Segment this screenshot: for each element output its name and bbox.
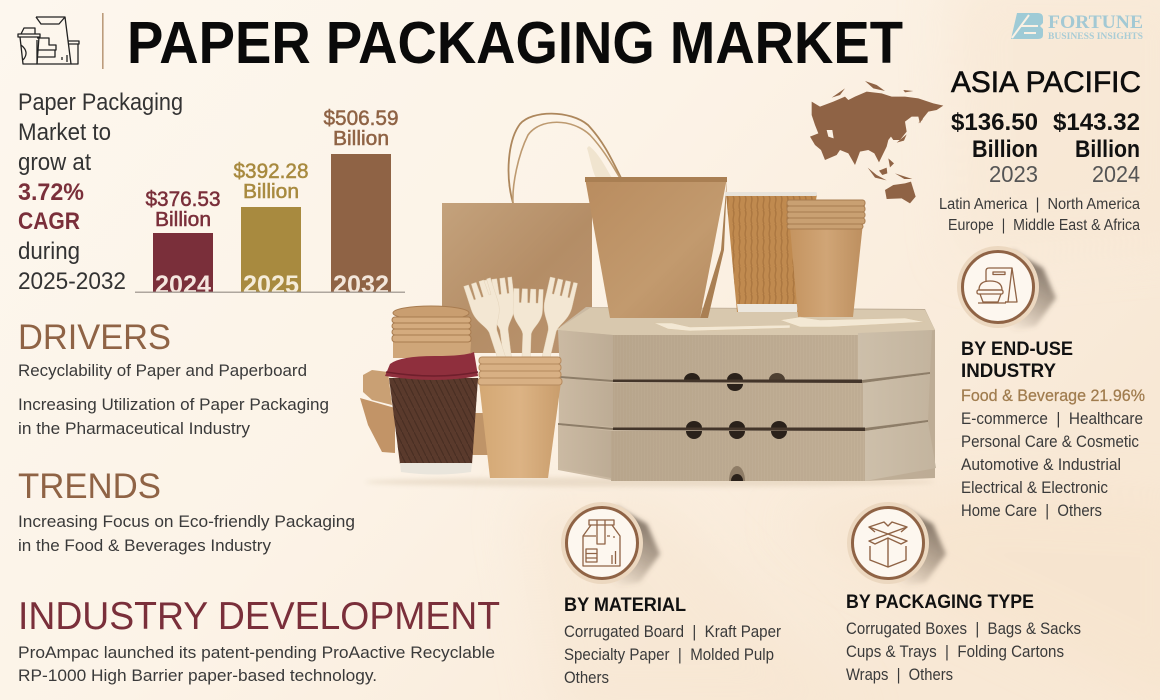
bar: 2024	[146, 188, 220, 299]
text block: CAGR summary: Paper Packaging	[18, 89, 183, 116]
bar: 2032: 2032	[333, 271, 389, 299]
text block: CAGR summary: 3.72%	[18, 179, 84, 206]
pizza box: top	[558, 330, 932, 382]
wooden forks on box	[654, 317, 925, 331]
by material	[564, 595, 781, 687]
text block: CAGR summary: 2025-2032	[18, 268, 126, 295]
bar chart: market size	[135, 107, 405, 299]
value: 2023	[951, 109, 1038, 187]
by packaging type: Corrugated Boxes | Bags & Sacks	[846, 620, 1081, 638]
pizza box: bottom	[558, 422, 936, 481]
paper bag	[442, 114, 621, 353]
paper cup stack, back	[787, 200, 865, 317]
by material: Corrugated Board | Kraft Paper	[564, 623, 781, 641]
photo: paper packaging products	[360, 114, 936, 487]
icon: by material	[561, 502, 660, 590]
kraft food pail	[585, 146, 727, 318]
bowl stack	[392, 306, 471, 358]
trends section: TRENDS	[18, 467, 161, 506]
logo: Fortune Business Insights: BUSINESS INSIGHTS	[1048, 32, 1143, 42]
left trays	[360, 370, 490, 455]
icon: by packaging type	[847, 502, 946, 590]
by material: BY MATERIAL	[564, 595, 686, 616]
value: 2023: $136.50	[951, 109, 1038, 136]
region: Asia Pacific: Latin America | North America	[939, 196, 1140, 213]
title: PAPER PACKAGING MARKET	[127, 10, 903, 76]
kraft cup with forks	[478, 357, 562, 478]
logo: Fortune Business Insights	[1011, 12, 1143, 42]
industry development section: RP-1000 High Barrier paper-based technology.	[18, 666, 377, 685]
by end-use industry: Personal Care & Cosmetic	[961, 433, 1139, 451]
by end-use industry	[961, 339, 1145, 520]
bar: 2032	[324, 107, 398, 299]
by packaging type: BY PACKAGING TYPE	[846, 592, 1034, 613]
industry development section: ProAmpac launched its patent-pending ProAactive Recyclable	[18, 643, 495, 662]
value: 2023: Billion	[972, 136, 1038, 163]
asia pacific map	[810, 81, 943, 203]
region: Asia Pacific	[939, 66, 1141, 234]
by material: Specialty Paper | Molded Pulp	[564, 646, 774, 664]
bar: 2032: Billion	[333, 128, 389, 150]
by material: Others	[564, 669, 609, 687]
drivers section	[18, 318, 329, 438]
region: Asia Pacific: ASIA PACIFIC	[951, 66, 1141, 99]
value: 2023: 2023	[989, 161, 1038, 187]
bar: 2025	[234, 160, 308, 299]
drivers section: in the Pharmaceutical Industry	[18, 419, 251, 438]
drivers section: Recyclability of Paper and Paperboard	[18, 361, 307, 380]
value: 2024: 2024	[1092, 161, 1140, 187]
bar: 2024: Billion	[155, 209, 211, 231]
bar: 2025: $392.28	[234, 160, 308, 183]
trends section	[18, 467, 355, 555]
by packaging type	[846, 592, 1081, 684]
text block: CAGR summary: Market to	[18, 119, 111, 146]
by packaging type: Wraps | Others	[846, 666, 953, 684]
text block: CAGR summary: during	[18, 238, 80, 265]
drivers section: Increasing Utilization of Paper Packaging	[18, 395, 329, 414]
text block: CAGR summary: grow at	[18, 149, 91, 176]
by end-use industry: Electrical & Electronic	[961, 479, 1108, 497]
text block: CAGR summary	[18, 89, 183, 295]
pizza boxes stack	[556, 307, 936, 481]
industry development section	[18, 595, 500, 685]
bar: 2024: $376.53	[146, 188, 220, 211]
by end-use industry: BY END-USE	[961, 339, 1073, 360]
ribbed cup, back	[725, 192, 817, 312]
logo: Fortune Business Insights: FORTUNE	[1048, 12, 1143, 33]
bar: 2024: 2024	[155, 271, 211, 299]
header icon: packaging outline	[18, 17, 79, 64]
bar: 2025: 2025	[243, 271, 299, 299]
value: 2024: $143.32	[1053, 109, 1140, 136]
by end-use industry: INDUSTRY	[961, 361, 1056, 382]
by end-use industry: Home Care | Others	[961, 502, 1102, 520]
by packaging type: Cups & Trays | Folding Cartons	[846, 643, 1064, 661]
by end-use industry: Food & Beverage 21.96%	[961, 387, 1145, 405]
pizza box: middle	[560, 374, 930, 428]
wooden forks in cup	[464, 277, 578, 366]
icon: end-use industry	[957, 246, 1056, 334]
trends section: Increasing Focus on Eco-friendly Packaging	[18, 512, 355, 531]
text block: CAGR summary: CAGR	[18, 208, 80, 235]
drivers section: DRIVERS	[18, 318, 171, 357]
by end-use industry: E-commerce | Healthcare	[961, 410, 1143, 428]
brown ribbed cup with red lid	[385, 352, 478, 474]
region: Asia Pacific: Europe | Middle East & Africa	[948, 217, 1140, 234]
bar: 2032: $506.59	[324, 107, 398, 130]
value: 2024: Billion	[1075, 136, 1140, 163]
bar: 2025: Billion	[243, 181, 299, 203]
industry development section: INDUSTRY DEVELOPMENT	[18, 595, 500, 638]
value: 2024	[1053, 109, 1140, 187]
by end-use industry: Automotive & Industrial	[961, 456, 1121, 474]
header divider	[102, 13, 104, 69]
trends section: in the Food & Beverages Industry	[18, 536, 271, 555]
